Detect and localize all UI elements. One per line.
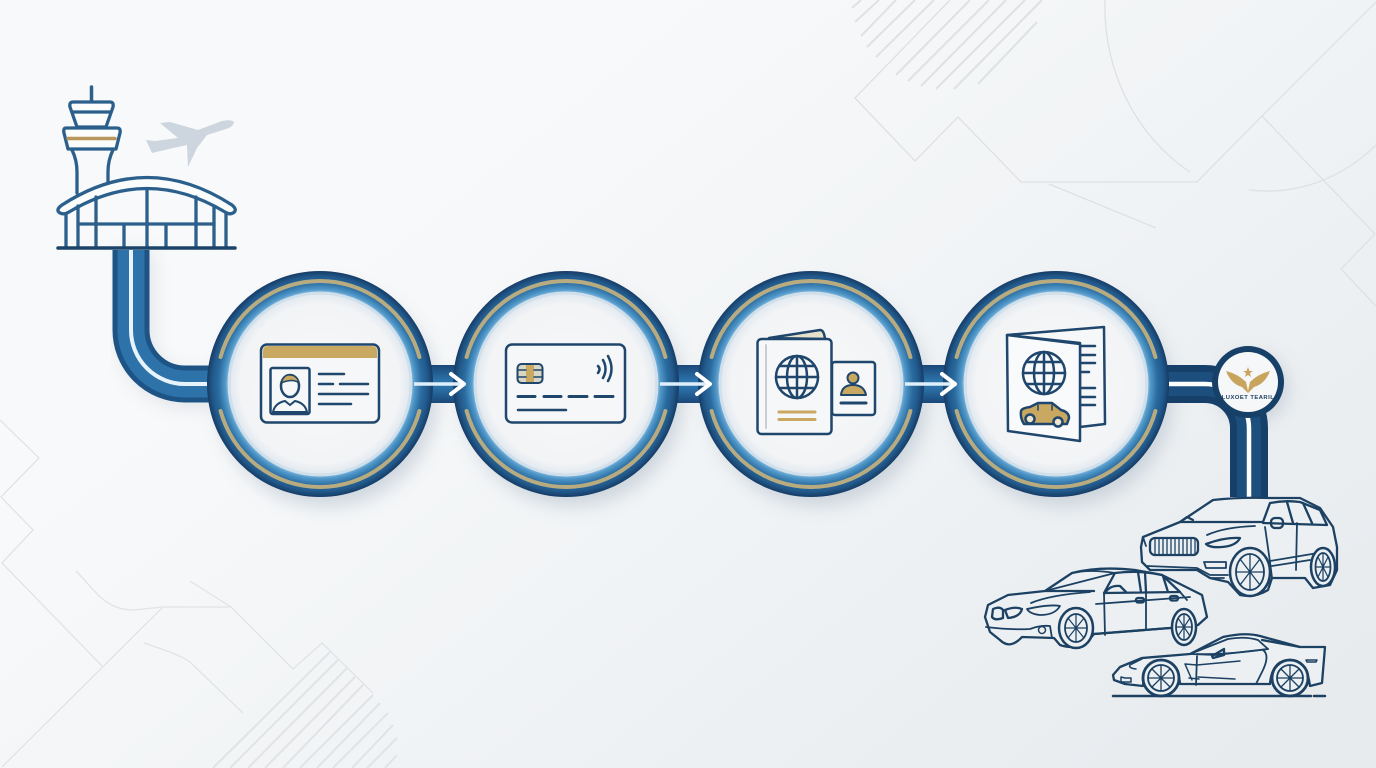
right pipe from last step to cars: [1150, 384, 1249, 497]
step 2: payment card: [453, 271, 679, 497]
icon: airplane: [146, 120, 234, 167]
icon: gold wing emblem: [1226, 367, 1270, 393]
icon: SUV outline: [1141, 498, 1337, 596]
icon: ID card: [261, 344, 379, 422]
background pattern: bottom left geometric lines: [0, 420, 397, 768]
icon: airport terminal and control tower: [58, 87, 235, 248]
badge text: LUXOET TEARIL: [1222, 395, 1274, 401]
step 3: passport and ID: [698, 271, 924, 497]
brand badge: [1212, 346, 1284, 418]
background pattern: top right geometric lines: [852, 0, 1376, 306]
drop shadows under pipes, steps and badge: [135, 250, 1288, 506]
step 1: ID card: [207, 271, 433, 497]
left pipe from terminal to first step: [131, 250, 215, 384]
icon: sports coupe outline: [1113, 634, 1325, 696]
connector pipes between steps: [420, 365, 960, 403]
icon: passport with ID card: [758, 330, 875, 434]
icon: folded document with globe and car: [1007, 327, 1105, 441]
icon: sedan outline: [985, 569, 1207, 648]
step 4: travel document with car: [943, 271, 1169, 497]
connector arrows: [414, 374, 955, 394]
icon: payment card: [506, 344, 625, 422]
